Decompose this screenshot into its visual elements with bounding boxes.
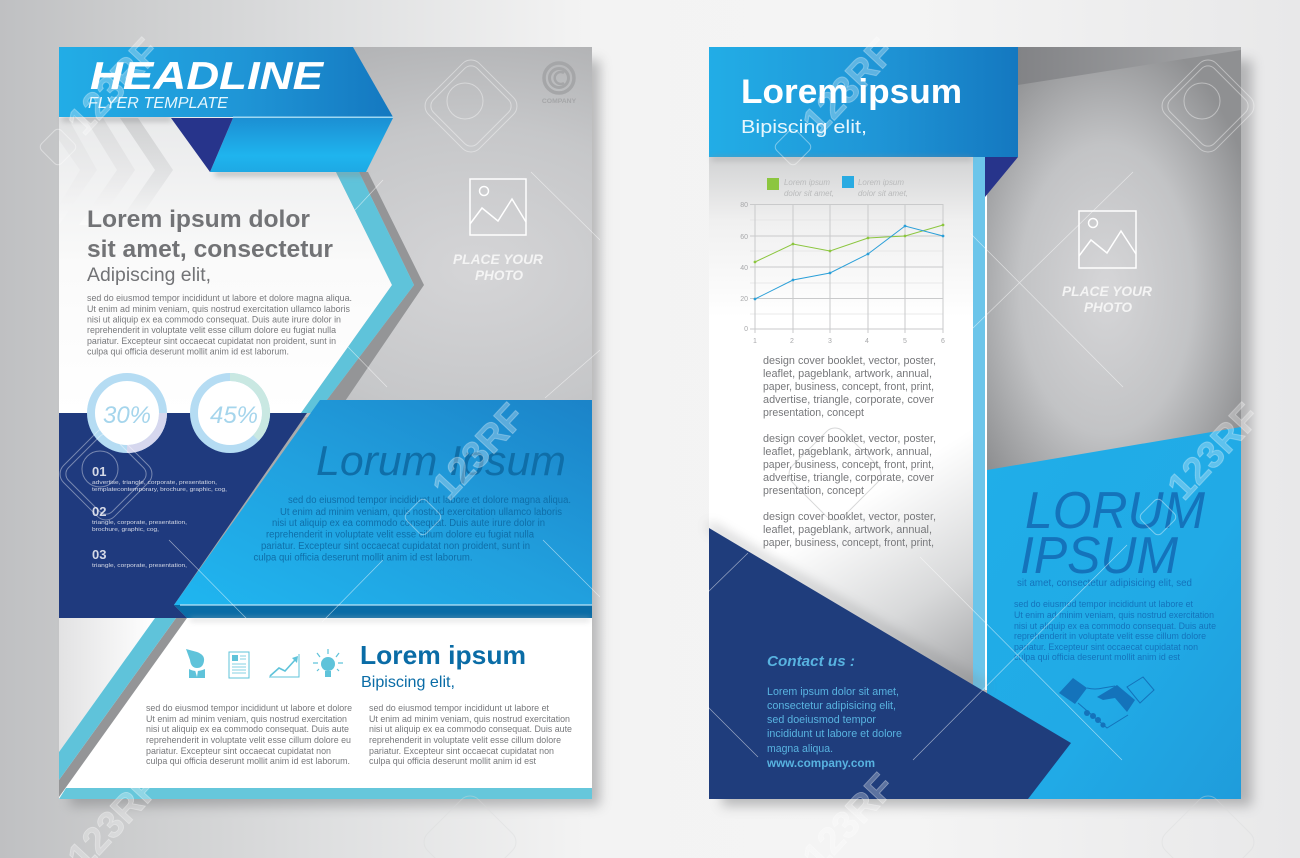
donut 30%: 30% [103, 402, 151, 429]
heading: lorum ipsum [1020, 482, 1206, 585]
grey photo panel [987, 47, 1241, 472]
column 1 text: Ut enim ad minim veniam, quis nostrud exercitation [146, 714, 347, 725]
text block 1: design cover booklet, vector, poster, [763, 355, 936, 367]
panel: right flyer [709, 47, 1252, 806]
contact text: www.company.com [766, 758, 875, 770]
donut 45% [194, 377, 266, 449]
heading: lorem ipsum lower: Lorem ipsum [360, 640, 526, 670]
white strip [985, 157, 987, 690]
header shadow [712, 157, 972, 160]
chevrons decoration [59, 118, 173, 225]
text block 3: leaflet, pageblank, artwork, annual, [763, 524, 932, 536]
list item 01: templatecontemporary, brochure, graphic, cog, [92, 487, 227, 493]
list item 01 [92, 464, 227, 493]
sub headline: FLYER TEMPLATE [88, 95, 229, 112]
lower grey fade [709, 400, 973, 690]
header banner [59, 47, 393, 117]
navy edge shadow [709, 526, 985, 688]
white hexagon area [59, 117, 392, 413]
heading: Lorem ipsum [741, 73, 962, 111]
column 2 text [369, 703, 572, 767]
blue panel [174, 400, 592, 605]
intro paragraph: Ut enim ad minim veniam, quis nostrud exercitation ullamco laboris [87, 304, 350, 315]
line chart: 60 [740, 234, 748, 241]
lower white section [59, 618, 592, 799]
green series [754, 224, 944, 263]
text block 1: advertise, triangle, corporate, cover [763, 394, 934, 406]
icon: handshake [1059, 677, 1154, 728]
line chart: 80 [740, 202, 748, 209]
contact text: magna aliqua. [767, 743, 833, 755]
photo caption: PHOTO [475, 268, 523, 283]
blue panel [987, 427, 1241, 799]
icon: photo placeholder [470, 179, 526, 235]
heading: lorum ipsum: LORUM [1025, 482, 1206, 540]
intro paragraph: culpa qui officia deserunt mollit anim id est laborum. [87, 346, 289, 358]
column 2 text: pariatur. Excepteur sint occaecat cupidatat non [369, 746, 554, 757]
subheading: Bipiscing elit, [741, 117, 867, 137]
contact text: sed doeiusmod tempor [767, 714, 876, 726]
text block 1 [763, 355, 936, 419]
company logo: COMPANY [542, 98, 577, 105]
column 1 text: pariatur. Excepteur sint occaecat cupidatat non [146, 746, 331, 757]
header block [709, 47, 1018, 157]
blue panel paragraph: Ut enim ad minim veniam, quis nostrud exercitation [1014, 610, 1214, 621]
banner fold [210, 118, 393, 172]
photo caption: PHOTO [1084, 300, 1132, 315]
navy triangle [709, 528, 1071, 799]
chart legend: Lorem ipsum [784, 178, 830, 187]
lower left grey wedge [59, 618, 155, 752]
fold highlight [233, 116, 393, 118]
blue panel paragraph: culpa qui officia deserunt mollit anim id est laborum. [254, 552, 472, 564]
list item 02 [92, 504, 187, 533]
intro paragraph: sed do eiusmod tempor incididunt ut labore et dolore magna aliqua. [87, 293, 352, 304]
flyer shadow [722, 60, 1252, 806]
list item 03 [92, 547, 187, 569]
watermark overlay: 123RF [1160, 396, 1268, 508]
line chart: 0 [744, 326, 748, 333]
icon: photo placeholder [1079, 211, 1136, 268]
blue panel paragraph [1014, 599, 1216, 663]
heading: lorum ipsum: Lorum Ipsum [316, 437, 566, 484]
text block 2: advertise, triangle, corporate, cover [763, 472, 934, 484]
grey photo background [59, 47, 592, 417]
text block 2: presentation, concept [763, 485, 864, 497]
chevron band teal [301, 172, 414, 413]
column 1 text: reprehenderit in voluptate velit esse cillum dolore eu [146, 735, 351, 746]
photo caption [1062, 284, 1152, 315]
text block 2: paper, business, concept, front, print, [763, 459, 934, 471]
line chart: 6 [941, 338, 945, 345]
watermark overlay: 123RF [795, 31, 903, 143]
contact text [766, 686, 902, 770]
line chart [740, 202, 945, 345]
chevron band grey [317, 172, 424, 413]
donut 45%: 45% [210, 402, 258, 429]
blue panel paragraph: reprehenderit in voluptate velit esse cillum dolore eu fugiat nulla [266, 530, 534, 540]
heading: lorem ipsum dolor [87, 206, 333, 286]
line chart: 4 [865, 338, 869, 345]
line chart: 3 [828, 338, 832, 345]
photo caption: PLACE YOUR [453, 252, 543, 267]
band shadow [190, 618, 590, 621]
heading: lorum ipsum: IPSUM [1020, 527, 1179, 585]
text block 2 [763, 433, 936, 497]
intro paragraph: reprehenderit in voluptate velit esse cillum dolore eu fugiat nulla [87, 325, 337, 336]
intro paragraph: pariatur. Excepteur sint occaecat cupidatat non proident, sunt in [87, 336, 336, 347]
fold shadow [215, 171, 365, 176]
chart legend: dolor sit amet, [858, 189, 908, 198]
list item 01: advertise, triangle, corporate, presentation, [92, 480, 217, 486]
blue panel paragraph: nisi ut aliquip ex ea commodo consequat. Duis aute [1014, 621, 1216, 632]
list item 02: brochure, graphic, cog, [92, 527, 159, 533]
tagline: sit amet, consectetur adipisicing elit, sed [1017, 577, 1192, 589]
blue panel paragraph: reprehenderit in voluptate velit esse cillum dolore [1014, 631, 1206, 642]
list item 02: triangle, corporate, presentation, [92, 520, 187, 526]
blue panel paragraph: pariatur. Excepteur sint occaecat cupidatat non proident, sunt in [261, 541, 530, 552]
intro paragraph [87, 293, 352, 358]
text block 3 [763, 511, 936, 549]
list item 03: triangle, corporate, presentation, [92, 563, 187, 569]
column 1 text: culpa qui officia deserunt mollit anim id est laborum. [146, 756, 350, 767]
band highlight [180, 604, 592, 606]
header shadow [62, 117, 172, 121]
column 2 text: sed do eiusmod tempor incididunt ut labore et [369, 703, 549, 714]
icon: document [229, 652, 249, 678]
watermark overlay: 123RF [425, 396, 533, 508]
blue series [754, 225, 944, 300]
text block 1: presentation, concept [763, 407, 864, 419]
icon: rising chart [269, 654, 299, 677]
photo caption: PLACE YOUR [1062, 284, 1152, 299]
line chart: 2 [790, 338, 794, 345]
blue panel lower band [174, 605, 592, 618]
chart legend: Lorem ipsum [858, 178, 904, 187]
contact text: incididunt ut labore et dolore [767, 728, 902, 740]
white page area [709, 157, 973, 799]
intro paragraph: nisi ut aliquip ex ea commodo consequat. Duis aute irure dolor in [87, 314, 341, 326]
light blue strip [973, 157, 985, 690]
headline: HEADLINE [90, 55, 324, 98]
blue panel paragraph [254, 495, 571, 564]
lower teal stripe [59, 618, 176, 780]
column 2 text: reprehenderit in voluptate velit esse cillum dolore [369, 735, 561, 746]
text block 3: design cover booklet, vector, poster, [763, 511, 936, 523]
contact heading: Contact us : [767, 654, 855, 670]
text block 1: paper, business, concept, front, print, [763, 381, 934, 393]
photo caption [453, 252, 543, 283]
bottom bar [59, 788, 592, 799]
heading: lorem ipsum dolor: sit amet, consectetur [87, 236, 333, 263]
panel: left flyer [59, 47, 600, 806]
list item 01: 01 [92, 464, 106, 479]
flyer shadow [70, 60, 600, 806]
fold triangle [171, 118, 233, 172]
blue panel paragraph: sed do eiusmod tempor incididunt ut labore et [1014, 599, 1193, 610]
line chart: 40 [740, 265, 748, 272]
contact text: Lorem ipsum dolor sit amet, [767, 686, 899, 698]
line chart: 20 [740, 296, 748, 303]
fold triangle [985, 157, 1018, 197]
blue panel paragraph: culpa qui officia deserunt mollit anim id est [1014, 652, 1180, 663]
contact text: consectetur adipisicing elit, [767, 700, 896, 712]
navy panel [59, 413, 307, 618]
text block 2: leaflet, pageblank, artwork, annual, [763, 446, 932, 458]
line chart: 5 [903, 338, 907, 345]
chart legend [767, 176, 908, 198]
column 2 text: nisi ut aliquip ex ea commodo consequat. Duis aute [369, 724, 572, 735]
blue panel paragraph: sed do eiusmod tempor incididunt ut labore et dolore magna aliqua. [288, 495, 571, 506]
top grey facet [1018, 47, 1241, 85]
column 2 text: Ut enim ad minim veniam, quis nostrud exercitation [369, 714, 570, 725]
icon: light bulb [313, 649, 343, 677]
lower grey stripe [59, 618, 187, 797]
blue panel paragraph: Ut enim ad minim veniam, quis nostrud exercitation ullamco laboris [280, 507, 562, 518]
subheading lower: Bipiscing elit, [361, 674, 455, 691]
line chart: 1 [753, 338, 757, 345]
column 1 text: nisi ut aliquip ex ea commodo consequat. Duis aute [146, 724, 349, 735]
column 1 text [146, 703, 352, 767]
text block 3: paper, business, concept, front, print, [763, 537, 934, 549]
company logo [542, 63, 577, 105]
chart legend: dolor sit amet, [784, 189, 834, 198]
list item 02: 02 [92, 504, 106, 519]
donut 30% [91, 377, 163, 449]
watermark overlay: 123RF [60, 31, 168, 143]
text block 1: leaflet, pageblank, artwork, annual, [763, 368, 932, 380]
blue panel paragraph: nisi ut aliquip ex ea commodo consequat. Duis aute irure dolor in [272, 518, 545, 529]
heading: lorem ipsum dolor: Lorem ipsum dolor [87, 206, 310, 233]
blue panel paragraph: pariatur. Excepteur sint occaecat cupidatat non [1014, 642, 1198, 653]
heading: lorem ipsum dolor: Adipiscing elit, [87, 265, 211, 286]
column 2 text: culpa qui officia deserunt mollit anim id est [369, 756, 536, 767]
list item 03: 03 [92, 547, 106, 562]
text block 2: design cover booklet, vector, poster, [763, 433, 936, 445]
column 1 text: sed do eiusmod tempor incididunt ut labore et dolore [146, 703, 352, 714]
icon: person [186, 649, 205, 678]
